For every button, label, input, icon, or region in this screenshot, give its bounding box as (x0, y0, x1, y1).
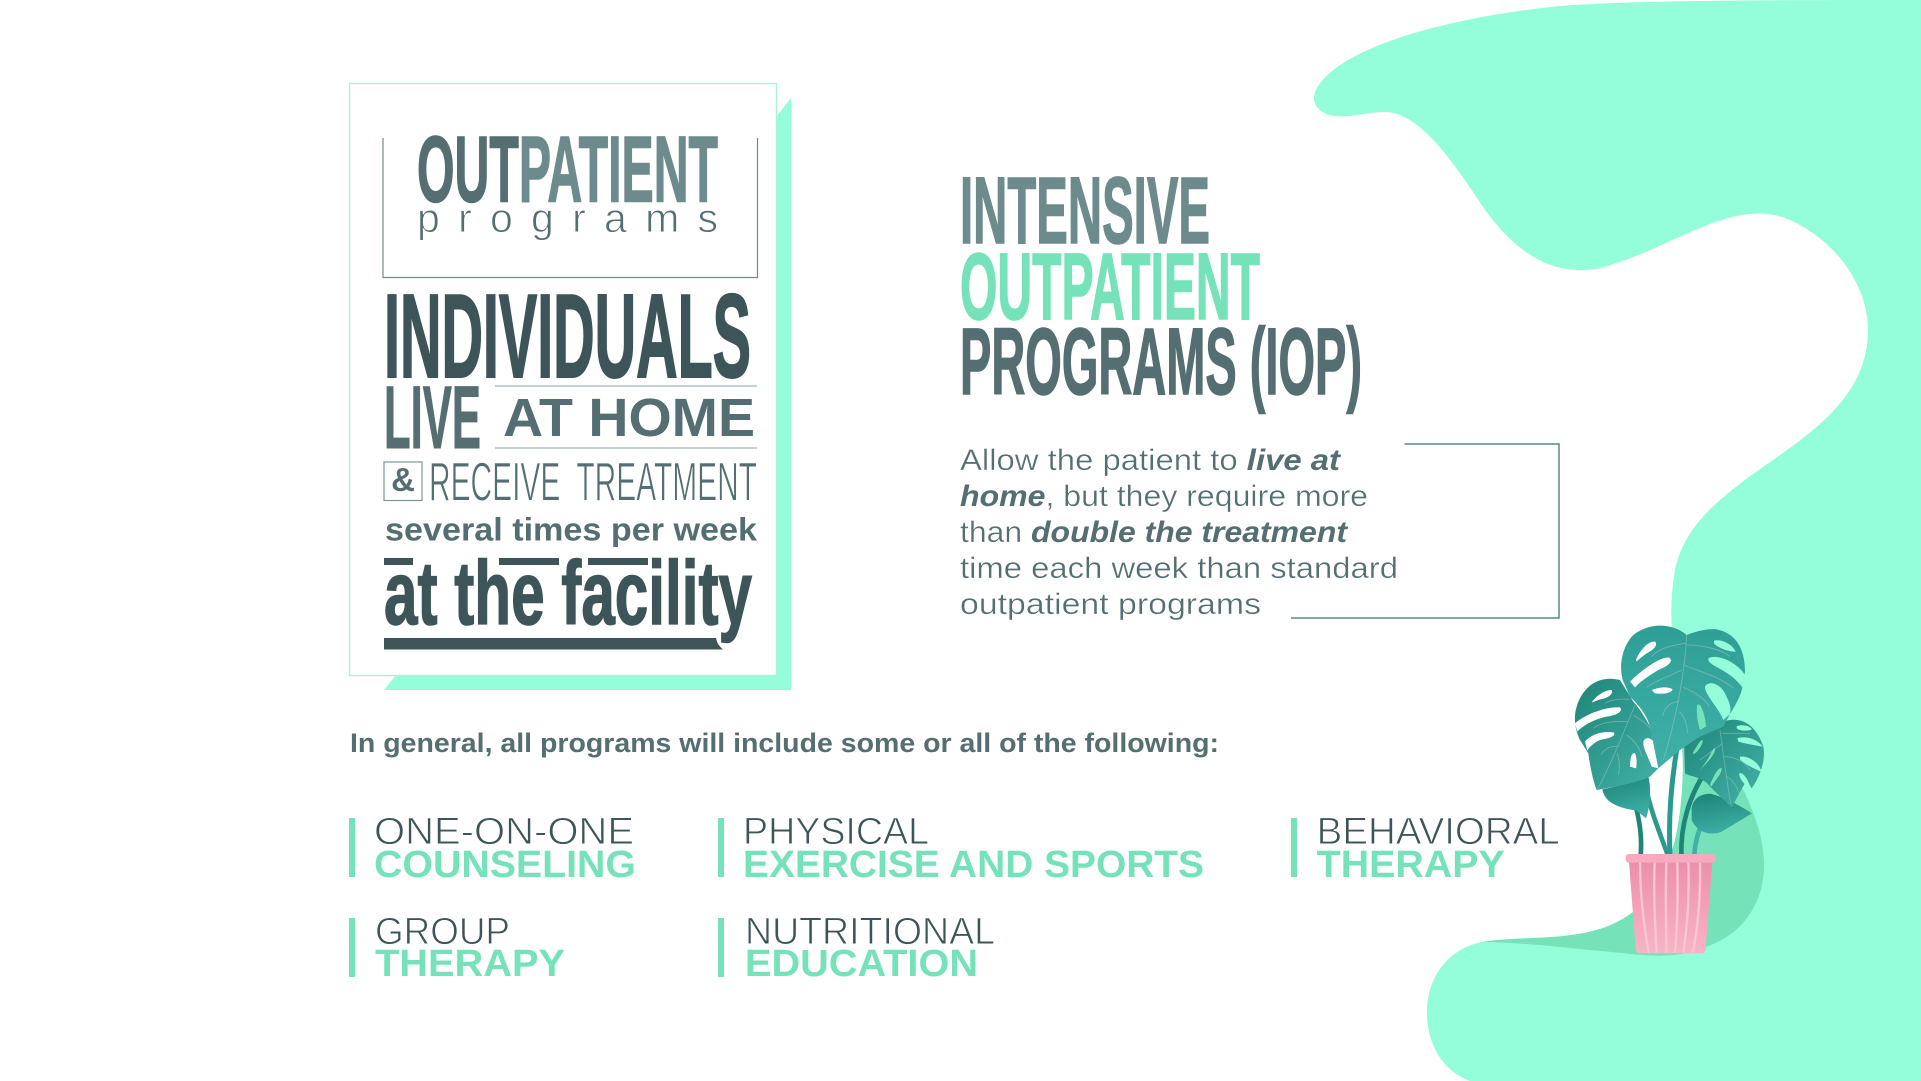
panel: outpatient programs card: LIVE (384, 367, 481, 467)
text: PROGRAMS (IOP) (960, 309, 1362, 415)
text: at the facility: at the facility (384, 544, 752, 644)
item: one-on-one counseling: COUNSELING (374, 844, 636, 886)
item: group therapy: GROUP (375, 911, 510, 953)
item: physical exercise and sports (718, 811, 1204, 886)
text: at home with rules: AT HOME (503, 388, 755, 448)
title line 1: INTENSIVE (960, 158, 1210, 264)
panel: outpatient programs card (350, 84, 791, 690)
panel: outpatient programs card: INDIVIDUALS (384, 270, 751, 403)
intro line: In general, all programs will include some or all of the following: (350, 728, 1219, 758)
heading: outpatient: OUTPATIENT (417, 116, 718, 222)
text: several times per week: several times per week (385, 512, 757, 548)
item: behavioral therapy: BEHAVIORAL (1317, 811, 1560, 853)
background blob (1314, 0, 1921, 1081)
description text: than double the treatment (960, 516, 1349, 549)
item: nutritional education: NUTRITIONAL (745, 911, 995, 953)
heading: programs: programs (417, 195, 718, 241)
bracket around description (1291, 444, 1559, 618)
top monstera leaf (1621, 626, 1745, 768)
title line 2: OUTPATIENT (960, 234, 1260, 340)
description text (960, 444, 1398, 621)
heading: intensive outpatient programs (960, 158, 1362, 415)
item: group therapy (349, 911, 565, 985)
card body (350, 84, 776, 676)
text: at the facility (384, 544, 752, 650)
pot stripes (1640, 863, 1700, 953)
item: nutritional education: EDUCATION (745, 943, 978, 985)
item: group therapy: THERAPY (375, 943, 565, 985)
card shadow (384, 98, 791, 690)
left monstera leaf (1575, 679, 1667, 790)
item: one-on-one counseling (349, 811, 636, 886)
ampersand box: & (391, 461, 415, 498)
blob shadow behind plant (1482, 745, 1764, 956)
plant stems (1630, 723, 1707, 855)
description text: Allow the patient to live at (960, 444, 1342, 477)
frame around heading (383, 138, 758, 278)
pot rim (1626, 854, 1716, 863)
item: physical exercise and sports: EXERCISE AND SPORTS (743, 844, 1204, 886)
icon: potted monstera plant (1575, 626, 1764, 953)
item: behavioral therapy: THERAPY (1317, 844, 1505, 886)
lower left heart leaf (1602, 777, 1650, 818)
right monstera leaf (1684, 720, 1764, 807)
text: receive treatment: RECEIVE TREATMENT (429, 452, 757, 512)
item: nutritional education (718, 911, 995, 985)
lower right heart leaf (1692, 794, 1752, 834)
ampersand box (384, 461, 422, 500)
item: physical exercise and sports: PHYSICAL (743, 811, 929, 853)
description text: time each week than standard (960, 552, 1398, 585)
pot body (1629, 862, 1712, 953)
description text: home, but they require more (960, 480, 1368, 513)
description text: outpatient programs (960, 588, 1261, 621)
item: one-on-one counseling: ONE-ON-ONE (374, 811, 634, 853)
item: behavioral therapy (1291, 811, 1560, 886)
